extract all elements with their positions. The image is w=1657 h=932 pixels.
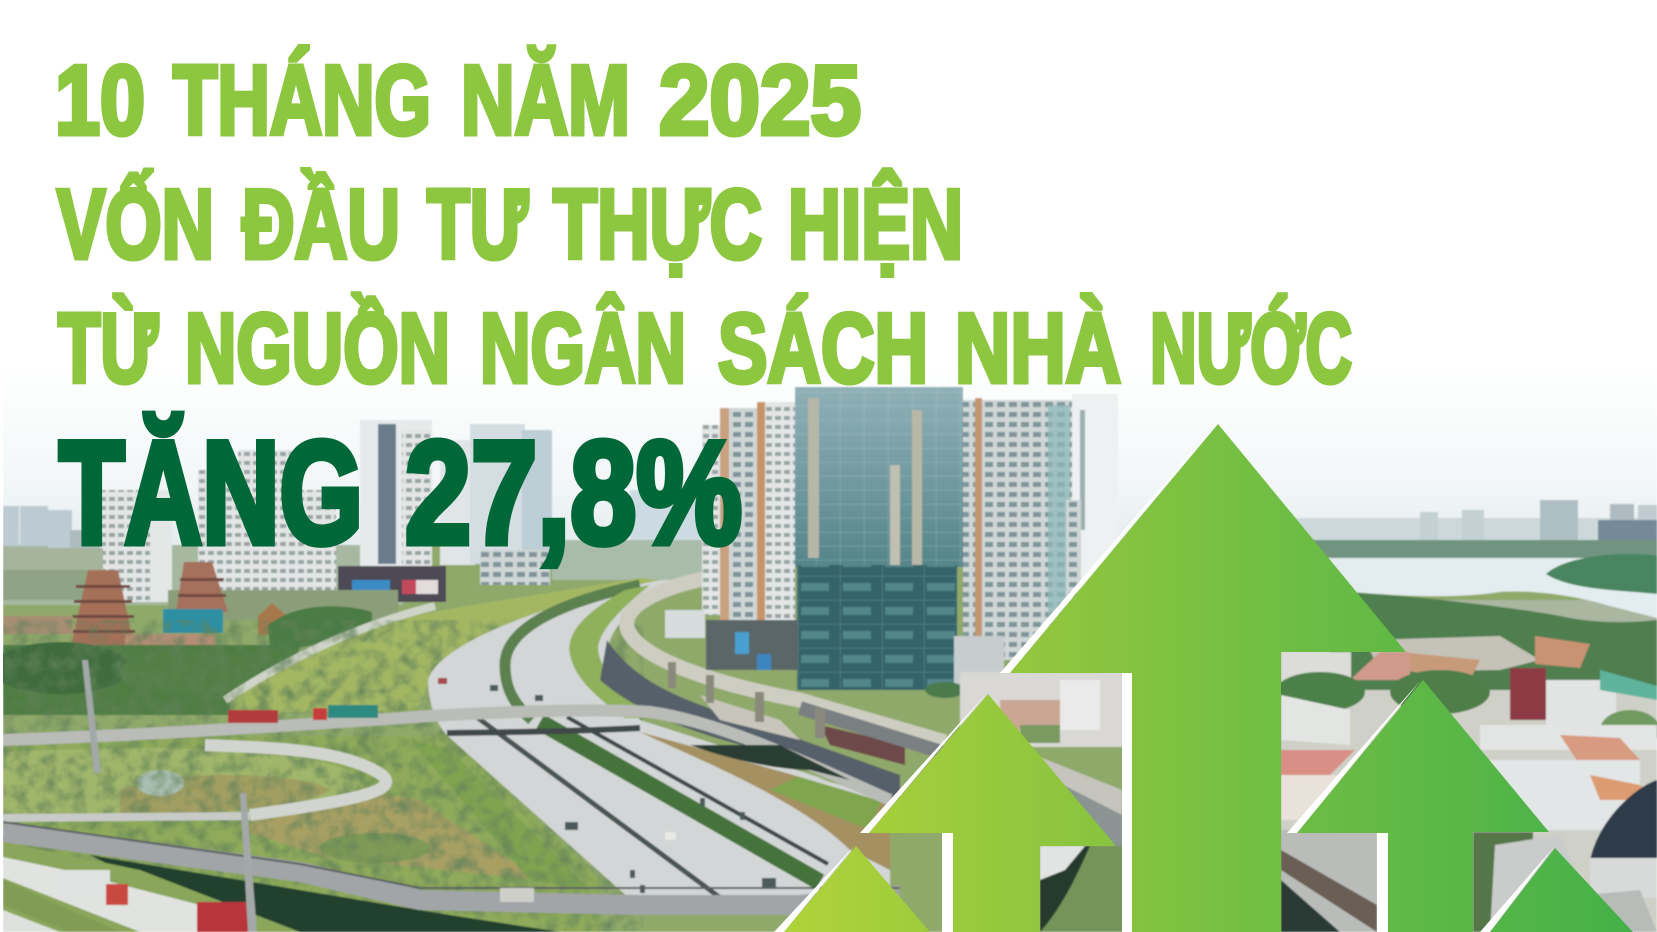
upper green median bbox=[505, 585, 640, 720]
title line 2: ĐẦU bbox=[242, 169, 400, 279]
distant skyline right bbox=[1296, 500, 1657, 541]
roundabout lawn bbox=[3, 733, 600, 932]
glass office tower bbox=[795, 387, 963, 690]
brown and green strip bbox=[640, 732, 890, 870]
headline figure: TĂNG bbox=[59, 411, 363, 574]
side road upper left bbox=[225, 606, 435, 700]
title line 3: TỪ bbox=[58, 293, 158, 403]
title line 2: VỐN bbox=[57, 169, 214, 279]
green slope bbox=[230, 578, 660, 712]
arrow: left medium bbox=[860, 694, 1116, 932]
river bbox=[1320, 558, 1657, 618]
title line 2: TƯ bbox=[427, 169, 528, 279]
grass median bbox=[569, 585, 650, 718]
brown ground bbox=[240, 794, 540, 880]
left towers bbox=[100, 420, 702, 602]
sky bbox=[3, 387, 1657, 545]
overpass bbox=[3, 710, 890, 800]
lower-left road bbox=[3, 856, 198, 932]
title line 2: HIỆN bbox=[788, 169, 963, 279]
dark median line 1 bbox=[478, 718, 730, 905]
title line 1: 2025 bbox=[659, 45, 861, 155]
ground base bbox=[3, 545, 1657, 932]
lower frontage road bbox=[3, 816, 250, 818]
title line 3: NHÀ bbox=[955, 293, 1121, 403]
poles bbox=[82, 660, 257, 932]
distant skyline left bbox=[3, 506, 100, 548]
main expressway bbox=[428, 580, 890, 908]
tree by tower bbox=[925, 682, 965, 698]
title line 1: THÁNG bbox=[173, 45, 431, 155]
loop road bbox=[205, 745, 386, 815]
houses between arrows bbox=[960, 672, 1125, 932]
title line 1 bbox=[55, 45, 861, 155]
title line 3: NGUỒN bbox=[185, 293, 450, 403]
vegetation texture bbox=[3, 620, 643, 932]
mall with billboards bbox=[338, 566, 446, 602]
strip road bbox=[796, 774, 872, 799]
title line 1: 10 bbox=[55, 45, 145, 155]
under overpass shadow bbox=[90, 855, 560, 932]
overpass trucks bbox=[228, 705, 378, 723]
hazy ground left bbox=[69, 547, 104, 570]
arrow: bottom right small bbox=[1480, 848, 1633, 932]
title line 2 bbox=[57, 169, 963, 279]
headline figure bbox=[59, 411, 742, 574]
trees left bbox=[0, 606, 372, 715]
arrow: right medium bbox=[1287, 680, 1549, 932]
lower trucks bbox=[57, 870, 534, 932]
title line 1: NĂM bbox=[461, 45, 630, 155]
shadow under metro bbox=[600, 640, 900, 800]
city photo bbox=[0, 360, 1657, 932]
arrow: centre large bbox=[1000, 424, 1406, 932]
left residential towers bbox=[702, 402, 795, 642]
lower overpass bbox=[3, 832, 900, 905]
cars bbox=[438, 678, 776, 893]
arrow: bottom left small bbox=[774, 846, 930, 932]
dark median line 2 bbox=[567, 717, 828, 864]
podium with blue signs bbox=[665, 610, 798, 670]
right riverside district bbox=[1275, 592, 1657, 932]
title line 3: SÁCH bbox=[718, 293, 928, 403]
far river bank bbox=[1313, 539, 1657, 558]
title line 3: NƯỚC bbox=[1150, 293, 1352, 403]
title line 3: NGÂN bbox=[480, 293, 686, 403]
right residential tower bbox=[954, 394, 1118, 686]
metro viaduct bbox=[627, 578, 945, 742]
pagodas bbox=[3, 561, 286, 646]
island bbox=[1546, 554, 1657, 594]
title line 3 bbox=[58, 293, 1352, 403]
tree median bbox=[540, 722, 820, 882]
arrows bbox=[774, 424, 1633, 932]
headline figure: 27,8% bbox=[405, 411, 742, 574]
title line 2: THỰC bbox=[553, 169, 762, 279]
